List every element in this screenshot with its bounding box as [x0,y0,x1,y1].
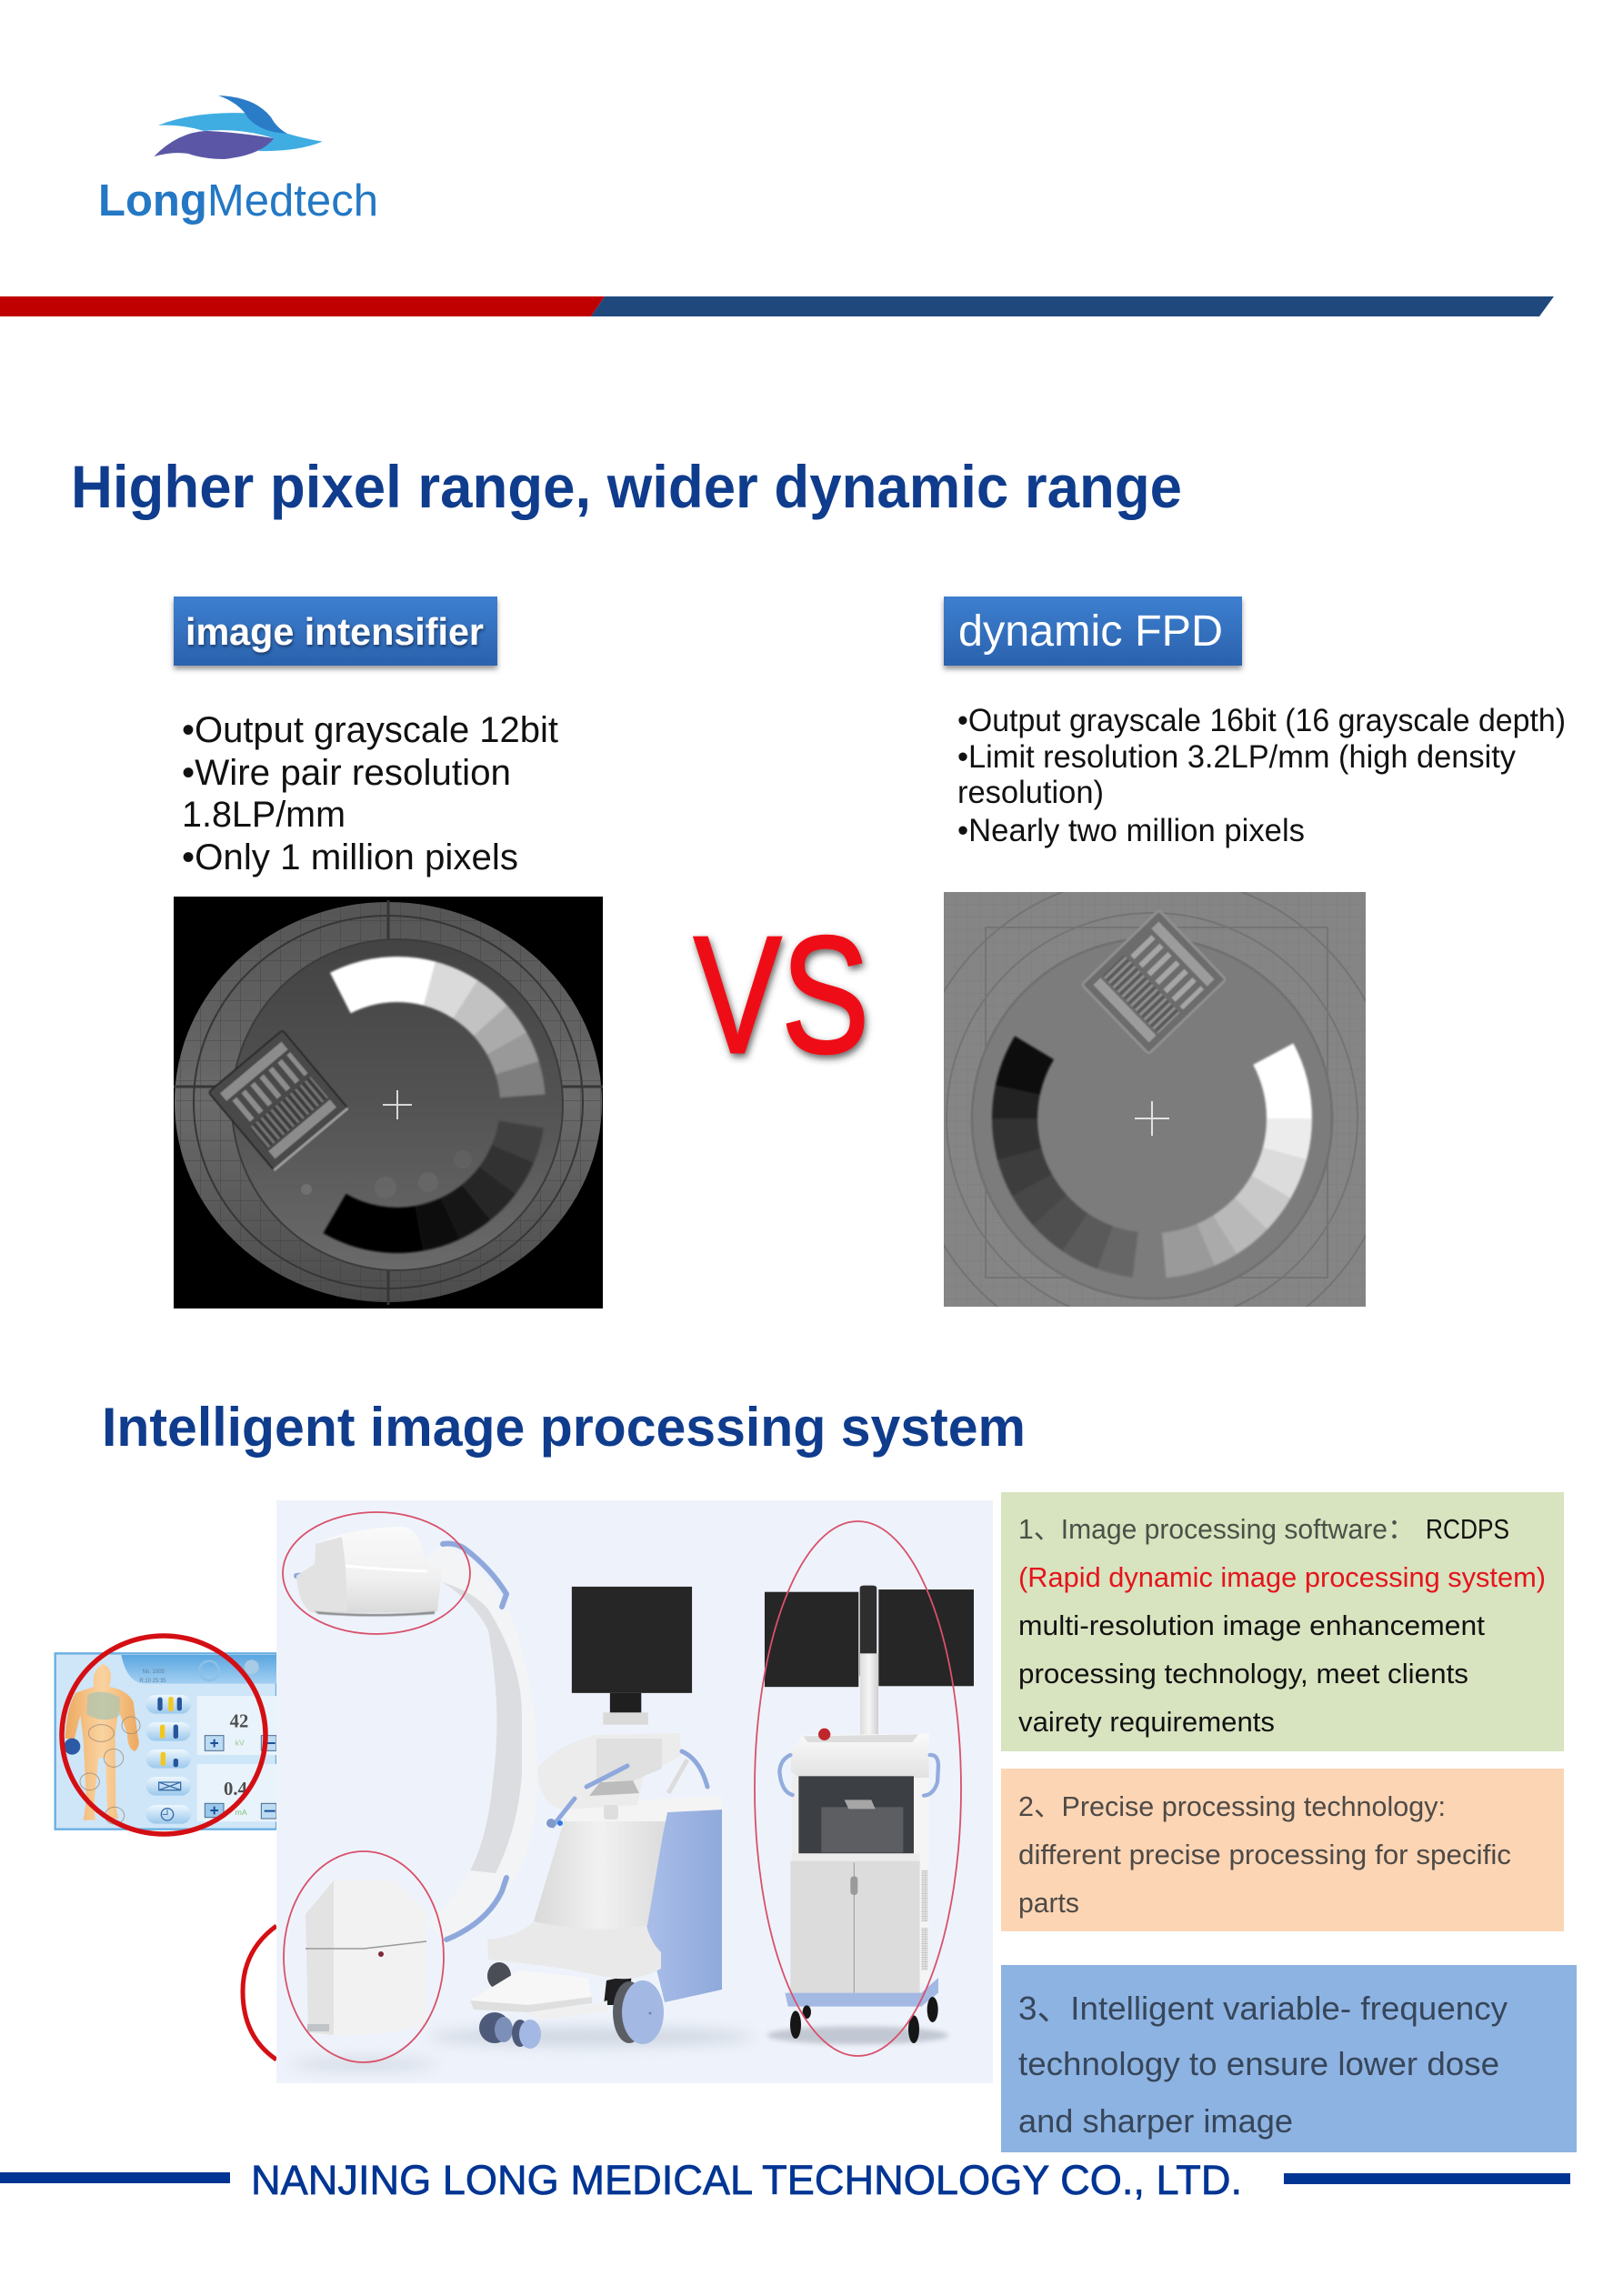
cart body [766,1653,948,2044]
panel: feature 1 image processing software: multi-resolution image enhancement [1018,1609,1485,1641]
text block: FPD specs: •Limit resolution 3.2LP/mm (high density [957,739,1516,775]
panel: feature 1 image processing software [1001,1492,1564,1751]
logo [98,95,378,226]
floor shadows [291,2028,755,2070]
grey-scale wedges, dark arc [991,1035,1138,1277]
VS label: VS [694,901,869,1088]
panel: touch-screen UI detail: No. 1005 [143,1669,165,1675]
text block: FPD specs: •Nearly two million pixels [957,813,1305,848]
red highlight ellipse: detector [284,1851,444,2062]
panel: feature 3 variable frequency: 3、Intelligent variable- frequency [1018,1990,1508,2027]
heading: higher pixel range: Higher pixel range, wider dynamic range [71,453,1182,520]
readout cards: 42 [230,1711,248,1731]
crosshair [1135,1101,1169,1136]
panel: feature 1 image processing software: (Rapid dynamic image processing system) [1018,1561,1546,1593]
grey-scale wedges, dark arc [322,1120,544,1255]
column and arm [534,1733,722,1930]
footer [0,2157,1570,2203]
base [487,1921,661,1979]
panel: touch-screen UI detail [55,1636,276,1834]
footer: NANJING LONG MEDICAL TECHNOLOGY CO., LTD. [251,2157,1242,2203]
heading: intelligent image processing system: Intelligent image processing system [102,1397,1026,1458]
control buttons [146,1695,191,1824]
blue generator box [645,1810,722,2002]
text block: image intensifier specs: 1.8LP/mm [182,795,346,835]
text block: FPD specs: •Output grayscale 16bit (16 grayscale depth) [957,703,1566,738]
red highlight ellipse: tube head [283,1512,470,1634]
label box: image intensifier [174,597,497,666]
wheels main unit [479,1980,664,2049]
line-pair test pattern [208,1030,348,1170]
X-ray tube head, top [296,1527,442,1617]
red highlight circle on UI [62,1636,265,1834]
panel: feature 2 precise processing [1001,1769,1564,1931]
C-arm handles [296,1544,506,1940]
grey-scale wedges, bright arc [1162,1042,1313,1278]
header bar [0,296,1554,316]
panel: feature 1 image processing software: RCDPS [1426,1513,1509,1545]
panel: feature 1 image processing software: processing technology, meet clients [1018,1658,1468,1689]
C-arm [425,1543,537,1943]
image: intensifier phantom x-ray [174,897,603,1308]
readout cards: kV [235,1738,245,1747]
panel: feature 3 variable frequency [1001,1965,1577,2152]
label box: image intensifier: image intensifier [185,610,484,653]
panel: feature 1 image processing software: 1、Image processing software： [1018,1513,1415,1545]
label box: dynamic FPD [944,597,1242,666]
monitor, main unit [572,1587,692,1725]
label box: dynamic FPD: dynamic FPD [958,607,1223,656]
text block: image intensifier specs: •Output grayscale 12bit [182,710,558,750]
panel: feature 2 precise processing: different precise processing for specific [1018,1839,1511,1870]
logo wordmark: LongMedtech [98,176,378,226]
panel: feature 3 variable frequency: technology to ensure lower dose [1018,2045,1499,2082]
red highlight ellipse: monitor cart [755,1521,961,2056]
panel: dynamic FPD [940,597,1564,1307]
detector box, bottom [306,1880,426,2035]
line-pair test pattern [1082,910,1226,1054]
panel: feature 2 precise processing: 2、Precise processing technology: [1018,1790,1446,1822]
icon: human body figure [65,1664,139,1820]
product image: C-arm unit and cart [291,1527,974,2070]
text block: image intensifier specs [182,710,558,877]
crosshair [383,1090,412,1119]
readout cards: mA [235,1808,247,1817]
panel: feature 1 image processing software: vairety requirements [1018,1706,1275,1738]
text block: image intensifier specs: •Only 1 million pixels [182,837,518,877]
panel: feature 3 variable frequency: and sharper image [1018,2102,1293,2140]
panel: feature 2 precise processing: parts [1018,1887,1079,1919]
foot plate [470,1970,607,2020]
panel: product image background [276,1500,993,2083]
rear wheel behind base [487,1962,511,1990]
cart monitors [765,1586,974,1687]
icon: bird logo mark [154,95,323,159]
grey-scale wedges, bright arc [329,955,546,1098]
text block: FPD specs [957,703,1566,848]
red arc partially hidden by product image [243,1926,276,2060]
wheel fork [604,1975,632,2005]
readout cards [197,1696,276,1821]
text block: FPD specs: resolution) [957,775,1104,810]
readout cards: 0.4 [224,1780,247,1800]
panel: image intensifier [174,597,603,1308]
panel: touch-screen UI detail: R:10 25:35 [139,1679,166,1684]
text block: image intensifier specs: •Wire pair resolution [182,753,511,793]
image: FPD phantom x-ray [944,892,1366,1307]
